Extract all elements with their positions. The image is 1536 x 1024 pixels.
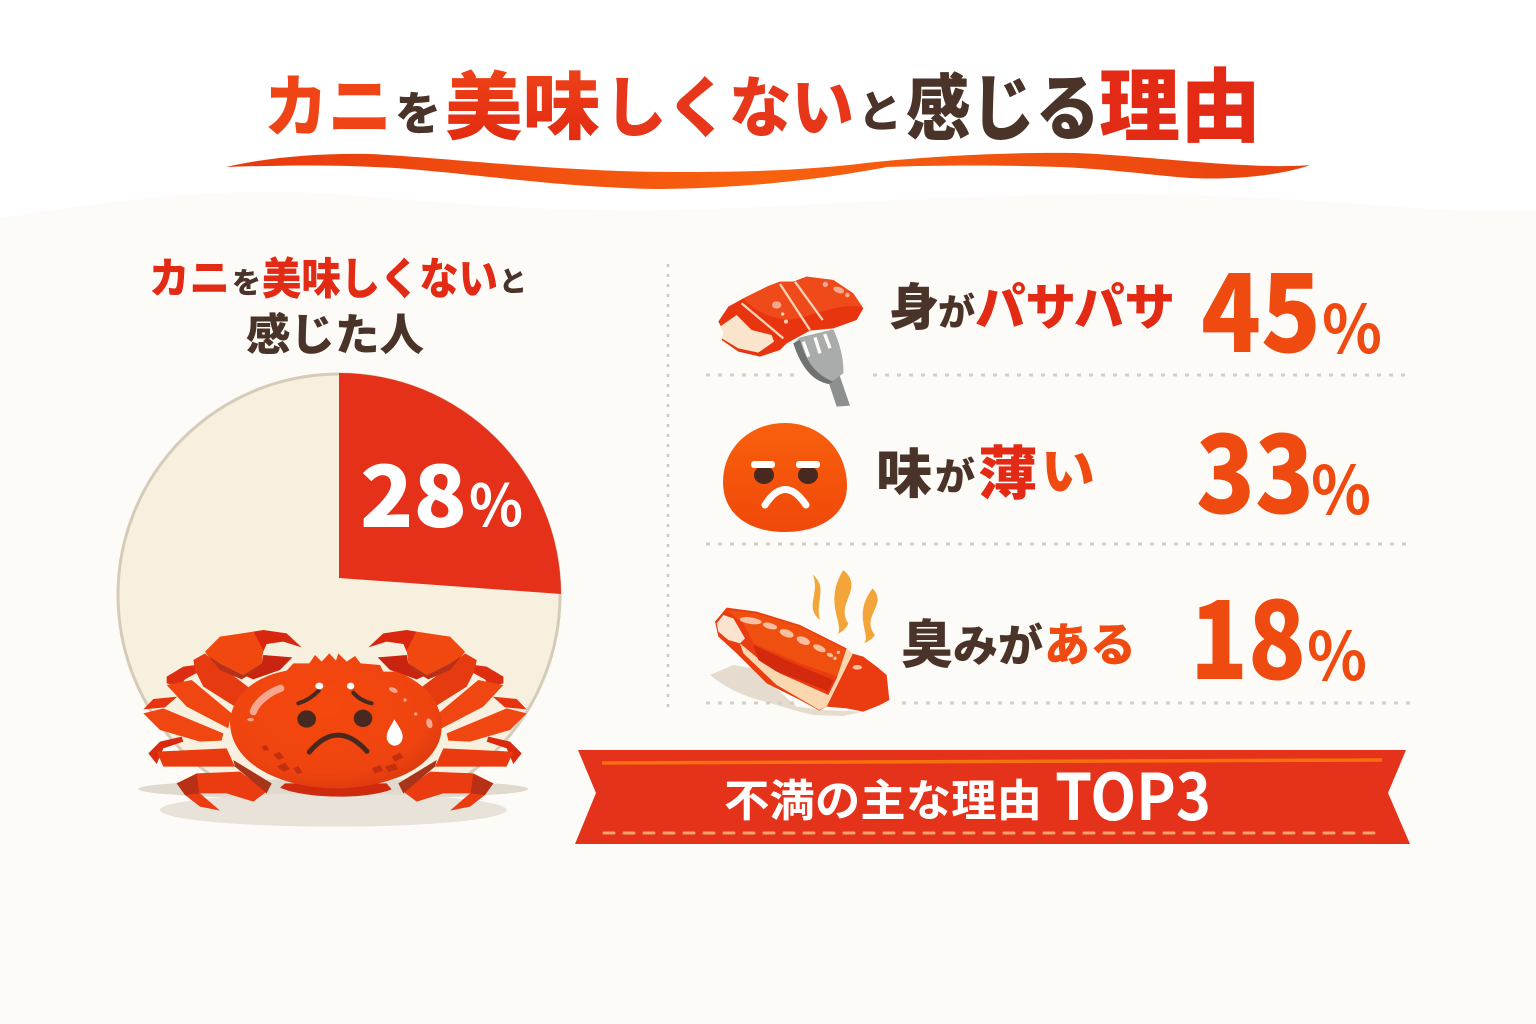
pie heading: 美味しくない bbox=[262, 243, 498, 307]
pie chart 28%: 28 bbox=[360, 431, 467, 552]
pie chart 28% bbox=[118, 373, 561, 816]
row 3: smell: % bbox=[1307, 604, 1367, 700]
row 3: smell: ある bbox=[1044, 609, 1136, 675]
icon: crab meat on fork bbox=[718, 277, 863, 407]
row 1: dry: パサパサ bbox=[975, 268, 1175, 340]
banner: TOP3 bbox=[1055, 747, 1211, 839]
divider vertical bbox=[667, 264, 669, 708]
row 1: dry: が bbox=[938, 282, 975, 336]
row 3: smell: みが bbox=[953, 610, 1043, 674]
row 2: bland: 薄 bbox=[978, 427, 1038, 511]
pie heading bbox=[149, 243, 527, 363]
value: 18 bbox=[1190, 556, 1306, 710]
pie heading: と bbox=[499, 260, 527, 300]
pie heading: 感じた人 bbox=[246, 299, 424, 363]
icon: frowning face bbox=[723, 423, 847, 532]
row 1: dry bbox=[718, 229, 1382, 407]
pie heading: カニ bbox=[149, 245, 230, 306]
row 3: smell bbox=[710, 556, 1367, 716]
title wave underline bbox=[226, 153, 1310, 189]
row 2: bland: % bbox=[1311, 438, 1371, 534]
icon: crab leg with odor bbox=[710, 570, 889, 716]
row 2: bland bbox=[723, 390, 1371, 544]
title: 感じる bbox=[906, 50, 1100, 155]
pie chart 28%: % bbox=[469, 459, 523, 543]
row 2: bland: い bbox=[1041, 430, 1095, 505]
banner: 不満の主な理由 bbox=[724, 765, 1042, 829]
icon: sad crab bbox=[138, 630, 528, 827]
title: カニ bbox=[264, 52, 392, 151]
label: 味 bbox=[876, 430, 932, 509]
label: 臭 bbox=[901, 603, 953, 678]
row 1: dry: % bbox=[1322, 277, 1382, 373]
label: 身 bbox=[889, 268, 939, 340]
title: を bbox=[395, 78, 441, 144]
pie heading: を bbox=[232, 260, 261, 302]
title: と bbox=[858, 76, 902, 140]
value: 45 bbox=[1201, 229, 1321, 383]
title: 理由 bbox=[1099, 43, 1261, 159]
title bbox=[264, 43, 1261, 159]
row 2: bland: が bbox=[935, 446, 975, 501]
value: 33 bbox=[1196, 390, 1314, 544]
title: しくない bbox=[604, 55, 854, 151]
title: 美味 bbox=[445, 48, 600, 155]
banner bbox=[575, 747, 1410, 844]
